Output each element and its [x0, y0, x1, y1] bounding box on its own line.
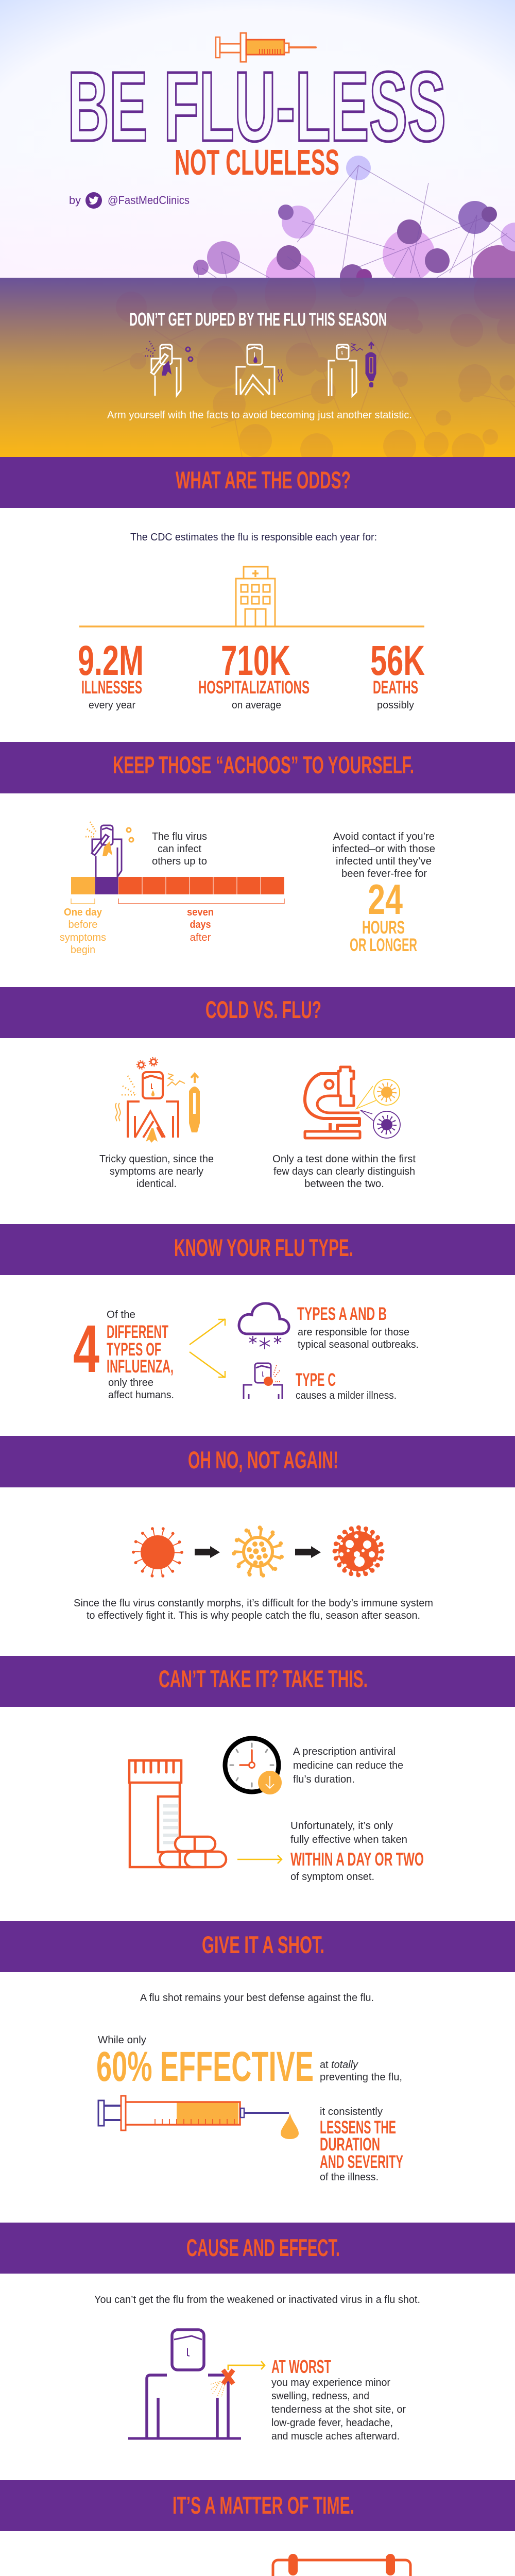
icon: pill bottle [129, 1760, 226, 1867]
text: can't get flu from shot: You can’t get the flu from the weakened or inactivated virus in a flu shot. [94, 2294, 420, 2306]
byline with twitter handle: by [69, 194, 81, 207]
text: at worst: you may experience minor [271, 2377, 390, 2388]
stat: four flu types: INFLUENZA, [107, 1357, 174, 1377]
text: within a day or two: of symptom onset. [290, 1871, 374, 1883]
text: infect others [152, 831, 207, 867]
text: antiviral medicine: flu’s duration. [293, 1774, 355, 1785]
stat: four flu types: affect humans. [108, 1389, 174, 1401]
icon: person with flu symptoms [115, 1058, 200, 1143]
stat: deaths [370, 637, 425, 711]
text: at worst: tenderness at the shot site, or [271, 2404, 406, 2415]
arrow: morph 2 [295, 1546, 321, 1558]
section band: know your flu type [0, 1224, 515, 1275]
stat: four flu types: 4 [73, 1311, 99, 1386]
stat: deaths: DEATHS [373, 677, 418, 698]
arrow: morph 1 [195, 1546, 220, 1558]
icon: virus solid [133, 1528, 182, 1577]
stat: deaths: 56K [370, 637, 425, 684]
text: avoid contact [332, 831, 435, 879]
heading: COLD VS. FLU? [205, 996, 321, 1023]
label: seven days after: days [190, 919, 211, 930]
text: at worst: swelling, redness, and [271, 2391, 369, 2402]
text: types A and B: typical seasonal outbreaks. [298, 1339, 419, 1350]
text: types A and B: TYPES A AND B [297, 1304, 387, 1324]
text: infect others: others up to [152, 856, 207, 867]
stat: 24 hours or longer [350, 875, 417, 955]
stat: 60 percent effective: While only [98, 2035, 146, 2046]
icon: microscope with virus slides [305, 1067, 400, 1138]
text: type C: TYPE C [296, 1370, 336, 1390]
text: tricky question: symptoms are nearly [110, 1166, 203, 1177]
label: seven days after: after [190, 932, 211, 943]
stat: 60 percent effective: 60% EFFECTIVE [96, 2043, 314, 2090]
text: lessens duration [320, 2106, 403, 2183]
section band: give it a shot [0, 1921, 515, 1972]
text: at worst [271, 2356, 406, 2442]
text: virus morphs: to effectively fight it. This is why people catch the flu, season after season. [87, 1610, 420, 1621]
text: avoid contact: infected–or with those [332, 843, 435, 855]
text: within a day or two: WITHIN A DAY OR TWO [290, 1849, 424, 1870]
icon: syringe with drop [98, 2096, 299, 2139]
arrow: down to type C [190, 1352, 225, 1378]
chart: contagious timeline [60, 877, 284, 956]
text: at worst: and muscle aches afterward. [271, 2431, 400, 2442]
heading: IT’S A MATTER OF TIME. [173, 2492, 354, 2519]
text: type C [296, 1370, 397, 1401]
text: avoid contact: been fever-free for [341, 868, 427, 879]
label: one day before: symptoms [60, 932, 106, 943]
stat: illnesses [78, 637, 144, 711]
text: avoid contact: infected until they’ve [336, 856, 432, 867]
heading: OH NO, NOT AGAIN! [188, 1446, 338, 1473]
text: lessens duration: it consistently [320, 2106, 383, 2117]
byline with twitter handle: @FastMedClinics [108, 194, 190, 207]
label: one day before: One day [64, 907, 102, 918]
text: tricky question [99, 1154, 214, 1190]
text: at worst: low-grade fever, headache, [271, 2417, 393, 2429]
stat: four flu types: Of the [107, 1309, 135, 1320]
heading: GIVE IT A SHOT. [202, 1931, 324, 1958]
heading: CAN’T TAKE IT? TAKE THIS. [159, 1665, 368, 1692]
icon: calendar [273, 2554, 410, 2576]
stat: deaths: possibly [377, 700, 414, 711]
stat: four flu types [73, 1309, 174, 1401]
stat: hospitalizations: HOSPITALIZATIONS [198, 677, 310, 698]
section band: achoos [0, 742, 515, 793]
text: at worst: AT WORST [271, 2356, 331, 2377]
text: infect others: The flu virus [152, 831, 207, 842]
text: antiviral medicine [293, 1746, 403, 1785]
text: type C: causes a milder illness. [296, 1390, 397, 1401]
text: only a test [272, 1154, 416, 1190]
subtitle: NOT CLUELESS [175, 142, 339, 182]
text: virus morphs: Since the flu virus constantly morphs, it’s difficult for the body’s immune system [74, 1598, 433, 1609]
stat: four flu types: TYPES OF [107, 1340, 161, 1360]
section band: what are the odds [0, 457, 515, 508]
text: only a test: between the two. [304, 1178, 384, 1190]
stat: four flu types: only three [108, 1377, 153, 1388]
molecule network decoration [193, 156, 515, 278]
stat: illnesses: 9.2M [78, 637, 144, 684]
arrow: to within a day or two [237, 1855, 282, 1863]
icon: snow cloud [239, 1303, 289, 1349]
text: types A and B: are responsible for those [298, 1327, 409, 1338]
icon: person with shot site [128, 2330, 241, 2438]
text: infect others: can infect [158, 843, 201, 855]
text: types A and B [297, 1304, 419, 1350]
icon: person with fever and thermometer [329, 343, 375, 396]
stat: 24 hours or longer: 24 [368, 875, 403, 923]
stat: 24 hours or longer: HOURS [362, 918, 405, 938]
icon: sneezing person on timeline [85, 822, 133, 877]
tagline: Arm yourself with the facts to avoid becoming just another statistic. [107, 410, 412, 421]
stat: 60 percent effective: preventing the flu, [320, 2072, 402, 2083]
icon: virus holes [335, 1528, 382, 1575]
icon: clock with down arrow [225, 1738, 282, 1794]
icon: hospital [79, 567, 424, 626]
text: best defense: A flu shot remains your best defense against the flu. [140, 1992, 374, 2004]
panel: header [0, 0, 515, 301]
faded molecule overlay [103, 345, 515, 457]
text: lessens duration: DURATION [320, 2134, 380, 2155]
heading: CAUSE AND EFFECT. [186, 2234, 340, 2261]
icon: person with chills [236, 345, 282, 395]
heading: WHAT ARE THE ODDS? [176, 466, 351, 494]
text: only a test: Only a test done within the first [272, 1154, 416, 1165]
text: antiviral medicine: medicine can reduce the [293, 1760, 403, 1771]
icon: sneezing person [145, 341, 193, 396]
stat: hospitalizations: on average [232, 700, 281, 711]
section band: cause and effect [0, 2223, 515, 2274]
icon: syringe [216, 33, 316, 62]
icon: virus spotted [229, 1523, 287, 1581]
stat: 60 percent effective: at totally [320, 2059, 358, 2071]
text: avoid contact: Avoid contact if you’re [333, 831, 435, 842]
label: one day before: before [68, 919, 98, 930]
text: lessens duration: of the illness. [320, 2172, 379, 2183]
text: virus morphs [74, 1598, 433, 1621]
icon: person coughing [244, 1363, 282, 1399]
label: seven days after [187, 907, 214, 943]
arrow: to at worst [228, 2361, 265, 2370]
label: one day before: begin [71, 944, 95, 956]
heading: KNOW YOUR FLU TYPE. [174, 1234, 353, 1261]
text: only a test: few days can clearly distinguish [273, 1166, 415, 1177]
label: seven days after: seven [187, 907, 214, 918]
text: within a day or two: fully effective when taken [290, 1834, 407, 1845]
text: antiviral medicine: A prescription antiviral [293, 1746, 396, 1757]
panel: don't get duped intro [0, 267, 515, 466]
stat: illnesses: every year [89, 700, 135, 711]
stat: illnesses: ILLNESSES [81, 677, 142, 698]
text: lessens duration: LESSENS THE [320, 2117, 396, 2138]
text: lessens duration: AND SEVERITY [320, 2152, 403, 2172]
byline with twitter handle [69, 192, 190, 209]
section band: can't take it [0, 1656, 515, 1707]
text: tricky question: identical. [136, 1178, 177, 1190]
stat: hospitalizations [198, 637, 310, 711]
text: within a day or two [290, 1820, 424, 1883]
text: within a day or two: Unfortunately, it’s only [290, 1820, 393, 1832]
section band: cold vs flu [0, 987, 515, 1038]
section band: oh no not again [0, 1436, 515, 1487]
arrow: up to types A and B [190, 1319, 225, 1345]
text: tricky question: Tricky question, since the [99, 1154, 214, 1165]
section band: matter of time [0, 2480, 515, 2531]
text: CDC estimate intro: The CDC estimates the flu is responsible each year for: [130, 532, 377, 543]
stat: 24 hours or longer: OR LONGER [350, 935, 417, 955]
stat: hospitalizations: 710K [221, 637, 290, 684]
stat: four flu types: DIFFERENT [107, 1322, 168, 1342]
label: one day before [60, 907, 106, 956]
